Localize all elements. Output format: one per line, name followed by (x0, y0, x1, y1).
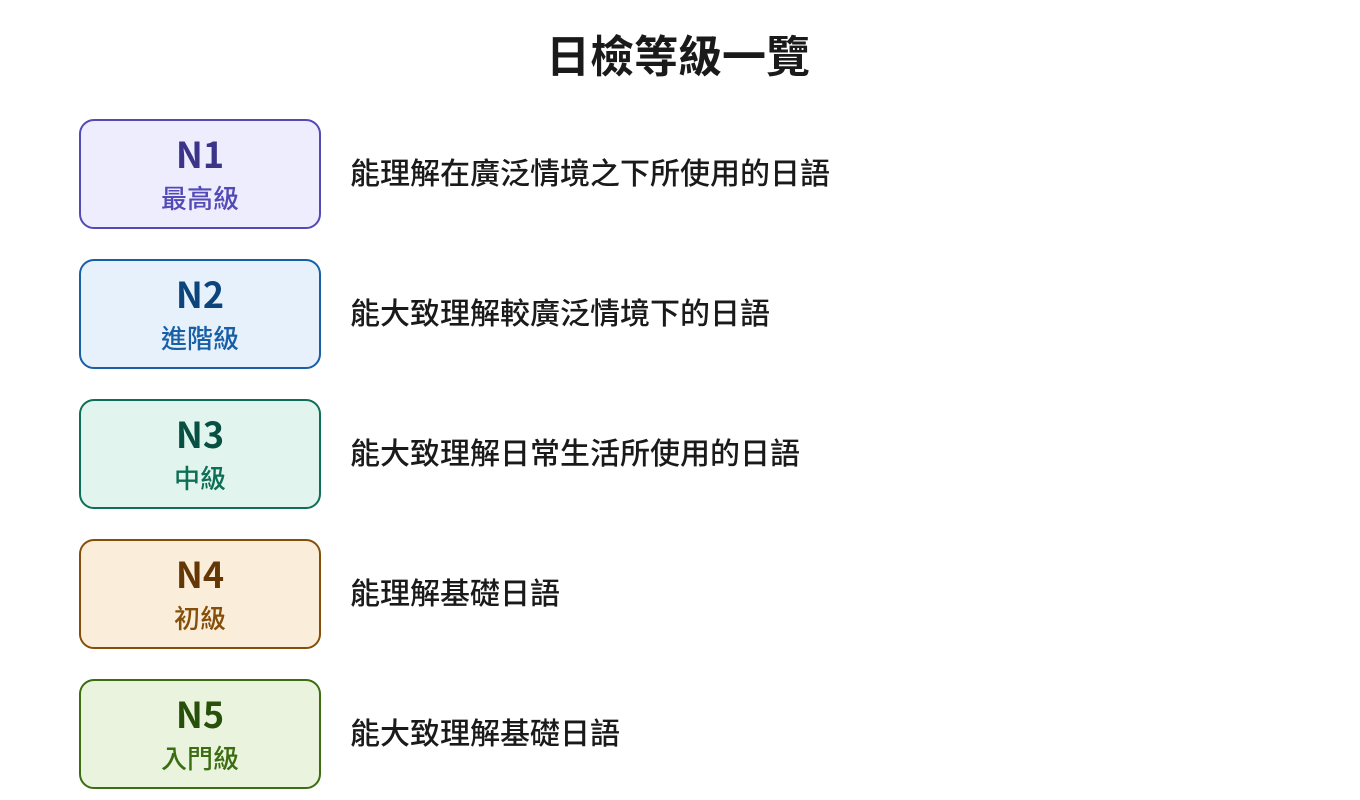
badge: N4 (79, 539, 321, 649)
badge: N1 (79, 119, 321, 229)
level: N3: N3 (176, 407, 224, 459)
sublabel: N5: 入門級 (161, 739, 239, 776)
level: N2: N2 (176, 267, 224, 319)
badge: N3 (79, 399, 321, 509)
sublabel: N1: 最高級 (161, 179, 239, 216)
level: N5: N5 (176, 687, 224, 739)
panel: N2 row (79, 259, 770, 369)
sublabel: N3: 中級 (174, 459, 226, 496)
title: 日檢等級一覽 (546, 21, 810, 85)
description: N2: 能大致理解較廣泛情境下的日語 (350, 289, 770, 333)
description: N3: 能大致理解日常生活所使用的日語 (350, 429, 800, 473)
panel: N5 row (79, 679, 620, 789)
description: N5: 能大致理解基礎日語 (350, 709, 620, 753)
panel: N3 row (79, 399, 800, 509)
description: N4: 能理解基礎日語 (350, 569, 560, 613)
panel: N1 row (79, 119, 830, 229)
sublabel: N4: 初級 (174, 599, 226, 636)
level: N4: N4 (176, 547, 224, 599)
panel: N4 row (79, 539, 560, 649)
badge: N5 (79, 679, 321, 789)
badge: N2 (79, 259, 321, 369)
sublabel: N2: 進階級 (161, 319, 239, 356)
level: N1: N1 (176, 127, 224, 179)
description: N1: 能理解在廣泛情境之下所使用的日語 (350, 149, 830, 193)
